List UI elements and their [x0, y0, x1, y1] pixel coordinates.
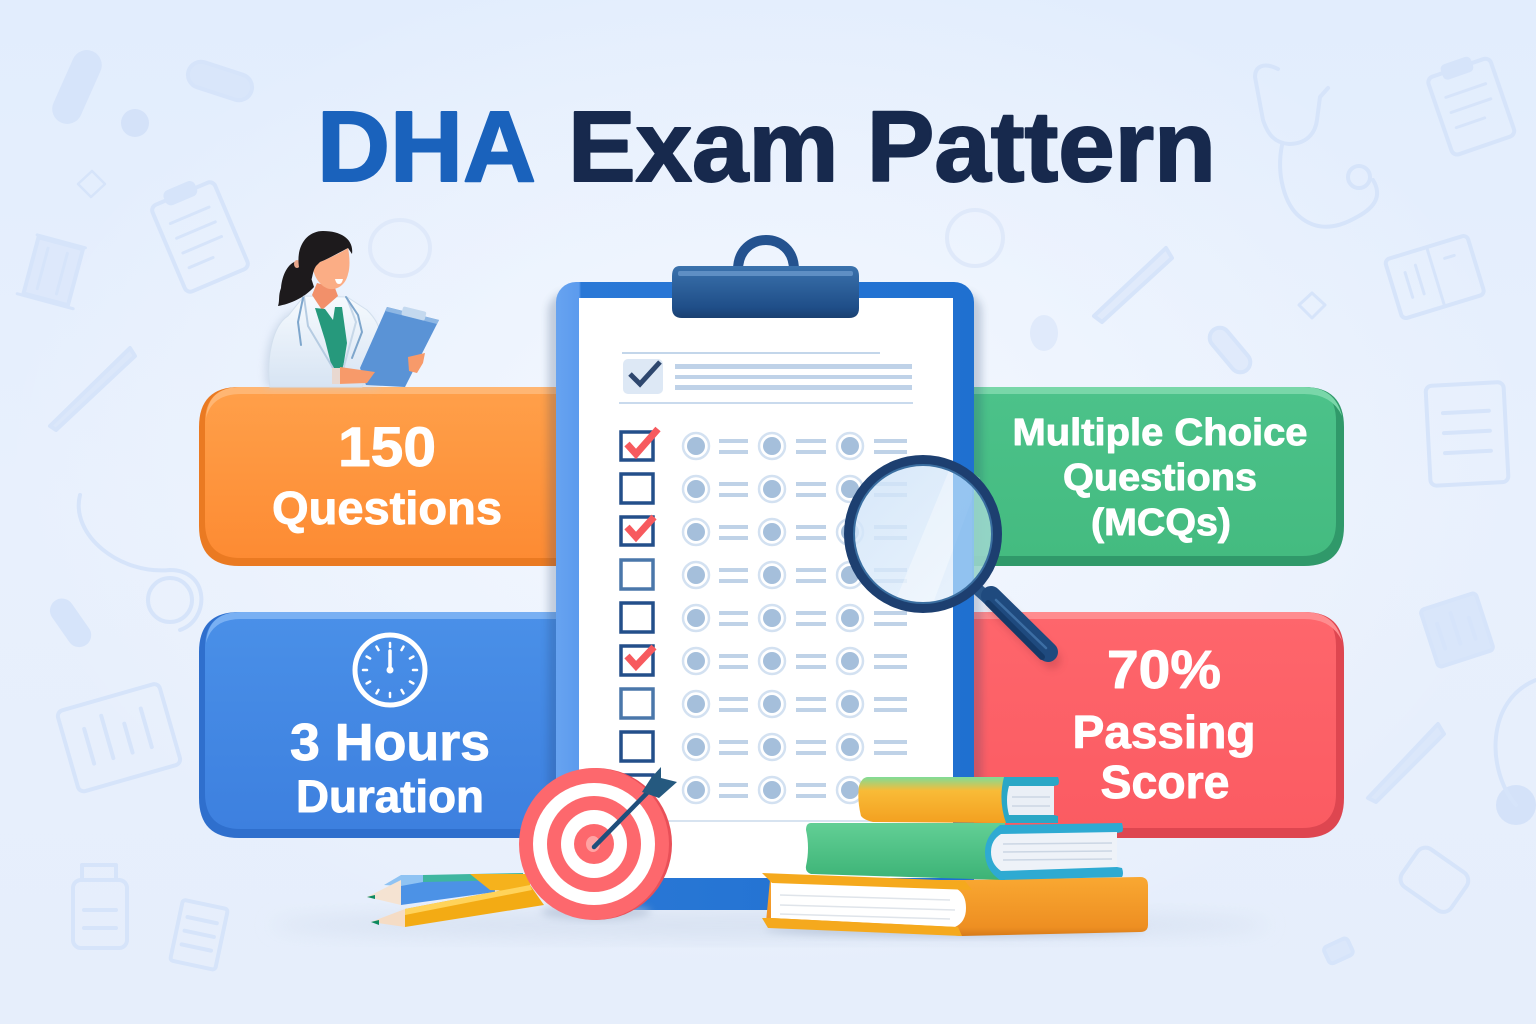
top yellow book [858, 777, 1059, 823]
icon: faint stethoscope edge [1496, 680, 1536, 825]
answer option rows [683, 433, 907, 803]
icon: faint star right [1299, 293, 1325, 318]
clipboard shadow [548, 292, 982, 902]
icon: faint star [78, 171, 105, 197]
red check marks [627, 429, 658, 666]
label: Questions: Questions [272, 482, 502, 534]
arrow [594, 790, 650, 847]
icon: faint pill top left [50, 48, 104, 126]
magnifying glass [849, 460, 1052, 660]
clip ring [738, 240, 794, 270]
yellow pencil upper [470, 874, 530, 892]
card: 70% Passing Score [970, 612, 1344, 838]
clipboard held [360, 307, 439, 387]
doctor illustration [265, 231, 439, 387]
rim [849, 460, 997, 608]
ground shadow [270, 911, 1270, 939]
blue pencil [401, 875, 495, 905]
face [313, 248, 350, 289]
number: 150: 150 [338, 415, 436, 478]
icon: faint clipboard top right [1425, 51, 1516, 156]
icon: faint chart left [56, 683, 181, 793]
card: 3 Hours Duration [199, 612, 560, 838]
ponytail [278, 261, 314, 306]
hands [338, 367, 375, 384]
hair tie [294, 260, 300, 268]
icon: faint brain right [947, 210, 1003, 266]
card: Multiple Choice Questions [970, 387, 1344, 566]
icon: faint stethoscope right [1255, 66, 1377, 227]
label: (MCQs): (MCQs) [1091, 502, 1231, 544]
checklist header [619, 353, 913, 403]
card: 150 Questions [199, 387, 560, 566]
label: Passing: Passing [1072, 706, 1256, 758]
hair [298, 231, 352, 283]
label: Duration: Duration [296, 771, 484, 822]
coat [269, 296, 380, 387]
icon: faint phone [1397, 844, 1472, 916]
icon: faint clipboard left [148, 174, 250, 294]
icon: faint pill lower left [48, 597, 93, 649]
icon: clock [355, 635, 425, 705]
icon: faint clipboard right [1425, 382, 1509, 486]
clipboard [548, 240, 982, 910]
answer option bubbles [687, 437, 859, 799]
title: DHA: DHA [317, 91, 536, 203]
icon: faint pen left [50, 348, 135, 430]
handle shadow [996, 606, 1052, 660]
handle neck [975, 587, 993, 603]
answer checkboxes [621, 432, 653, 793]
icon: faint syringe [1094, 248, 1172, 322]
doctor shadow [265, 300, 378, 387]
number: 70%: 70% [1107, 640, 1221, 700]
label: 3 Hours: 3 Hours [290, 714, 490, 772]
coat lapels and stethoscope [298, 297, 362, 370]
yellow pencil [405, 885, 544, 927]
icon: faint capsule [185, 58, 255, 104]
title: Exam Pattern: Exam Pattern [568, 91, 1216, 203]
icon: faint capsule middle [1206, 324, 1254, 376]
icon: faint folder right [1385, 235, 1485, 319]
icon: faint pen right [1368, 724, 1444, 802]
lens [849, 460, 997, 608]
neck and chest [312, 283, 338, 310]
clip clamp [672, 266, 859, 318]
smile [335, 279, 343, 284]
handle grip [991, 596, 1048, 652]
label: Questions: Questions [1063, 457, 1257, 499]
label: Score: Score [1100, 756, 1230, 808]
book stack [762, 777, 1148, 937]
icon: faint check badge [121, 109, 149, 137]
label: Multiple Choice: Multiple Choice [1012, 412, 1308, 454]
scrubs [315, 307, 347, 368]
icon: faint notes [170, 900, 228, 970]
icon: faint pill bottom right [1323, 937, 1354, 965]
icon: faint brain left [370, 220, 430, 276]
icon: faint stethoscope left [79, 495, 201, 630]
answer option rings [683, 433, 863, 803]
answer option lines [719, 441, 907, 796]
icon: faint test tube rack [17, 234, 89, 309]
middle green book [806, 823, 1123, 880]
icon: faint mouse [1030, 315, 1058, 351]
icon: faint chart right [1420, 593, 1494, 667]
target [519, 767, 677, 920]
icon: faint bottle [73, 865, 127, 948]
bottom orange book [762, 873, 1148, 936]
pencils [367, 873, 544, 927]
